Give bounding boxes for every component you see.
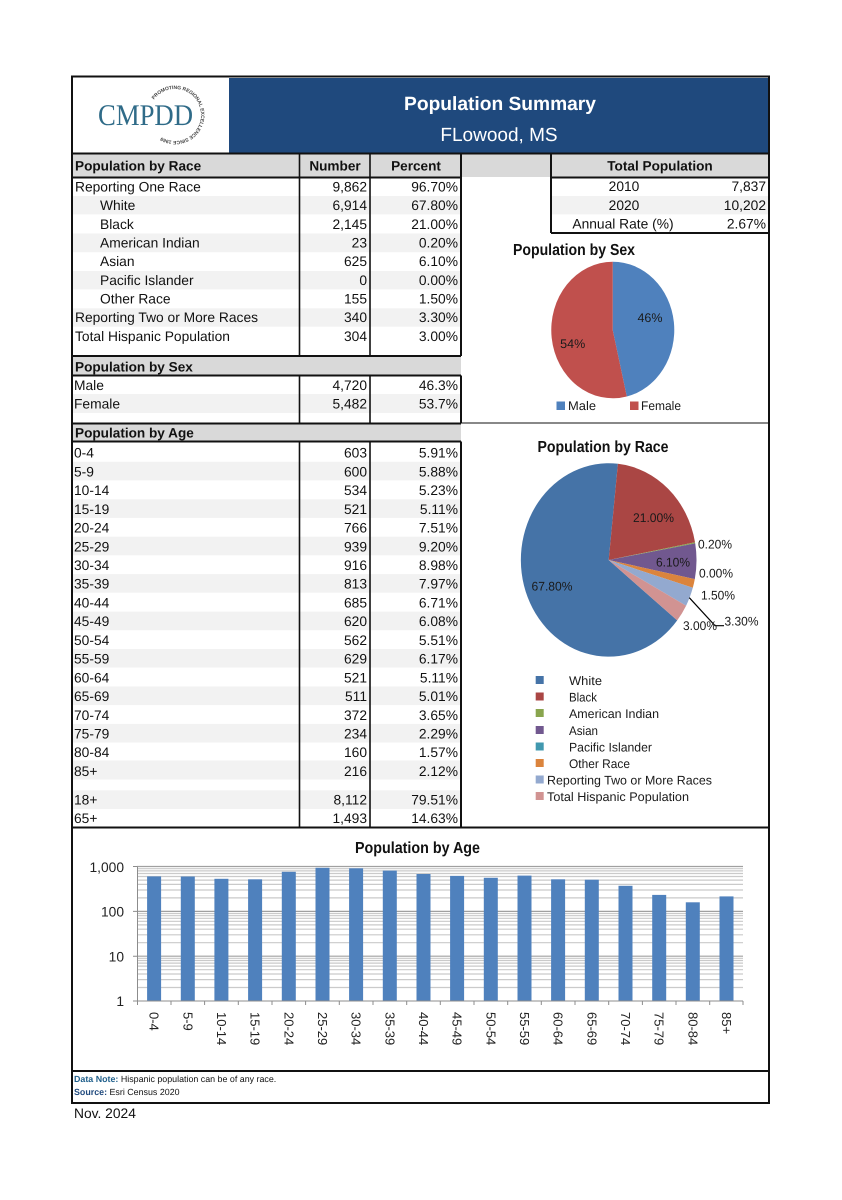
row: Total Hispanic Population xyxy=(75,329,458,344)
row: Asian xyxy=(100,254,458,269)
date: Nov. 2024 xyxy=(74,1106,136,1121)
row: Reporting One Race xyxy=(75,180,458,194)
row: 15-19 xyxy=(73,499,461,518)
legend: race: Asian xyxy=(569,724,598,738)
row: 10-14: 5.23% xyxy=(419,483,458,498)
heading: population by race: Number xyxy=(309,158,361,174)
table: total population xyxy=(551,154,768,232)
slice: american indian xyxy=(609,542,695,560)
row: 20-24: 766 xyxy=(344,521,367,536)
row: Other Race xyxy=(100,292,458,306)
slice: asian xyxy=(609,543,697,579)
row: 15-19: 5.11% xyxy=(420,502,458,517)
row: 2010: 7,837 xyxy=(731,179,766,194)
row: 30-34: 30-34 xyxy=(74,558,110,573)
x axis labels: 55-59 xyxy=(517,1012,532,1045)
row: Other Race: 1.50% xyxy=(419,292,458,306)
row: 15-19: 15-19 xyxy=(74,502,110,517)
row: Reporting One Race: 96.70% xyxy=(411,180,458,194)
label: 1.50%: 1.50% xyxy=(701,588,735,602)
row: 65+: 65+ xyxy=(74,811,97,826)
row: 50-54: 562 xyxy=(344,633,367,648)
row: 70-74: 372 xyxy=(344,708,367,723)
legend: sex xyxy=(556,399,681,413)
row: 0-4: 603 xyxy=(344,446,367,461)
row: 60-64: 521 xyxy=(344,670,367,685)
row: Reporting Two or More Races xyxy=(73,308,461,327)
row: 30-34: 916 xyxy=(344,558,367,573)
row: 75-79: 234 xyxy=(344,726,367,742)
row: 30-34: 8.98% xyxy=(419,558,458,573)
row: 65-69: 65-69 xyxy=(74,689,110,704)
row: 25-29: 25-29 xyxy=(74,539,110,554)
row: 45-49: 6.08% xyxy=(419,614,458,629)
row: Female: 5,482 xyxy=(332,396,367,412)
x axis labels: 75-79 xyxy=(652,1012,667,1045)
heading: population by race: Population by Race xyxy=(75,158,202,174)
row: 15-19: 521 xyxy=(344,502,367,517)
row: Black: Black xyxy=(100,217,134,232)
x axis labels: 65-69 xyxy=(584,1012,599,1045)
y axis labels xyxy=(89,860,124,1009)
row: 25-29: 939 xyxy=(344,539,367,554)
x axis labels: 20-24 xyxy=(281,1012,296,1045)
legend: race: Other Race xyxy=(569,757,630,771)
row: 35-39 xyxy=(73,574,461,593)
row: 25-29 xyxy=(73,537,461,555)
row: White: White xyxy=(100,198,136,213)
heading: population by age: Population by Age xyxy=(75,426,194,440)
table: population by sex xyxy=(73,357,461,413)
row: American Indian: 23 xyxy=(352,236,367,250)
x axis labels: 40-44 xyxy=(416,1012,431,1045)
logo: CMPDD xyxy=(98,86,204,144)
row: 0-4: 5.91% xyxy=(419,446,458,461)
label: 0.00%: 0.00% xyxy=(699,566,733,580)
row: 40-44 xyxy=(74,596,458,610)
row: Pacific Islander: Pacific Islander xyxy=(100,273,194,288)
row: American Indian: 0.20% xyxy=(419,236,458,250)
row: Pacific Islander xyxy=(73,271,461,289)
row: 70-74 xyxy=(74,708,458,723)
x axis labels: 70-74 xyxy=(618,1012,633,1045)
slice: black xyxy=(609,464,695,560)
legend: race: Total Hispanic Population xyxy=(547,790,689,804)
heading: population by age xyxy=(73,424,461,442)
row: Total Hispanic Population: 304 xyxy=(344,329,367,344)
row: 20-24 xyxy=(74,521,458,536)
slice: female xyxy=(551,262,627,398)
row: 80-84: 160 xyxy=(344,745,367,760)
row: 75-79: 2.29% xyxy=(419,726,458,742)
row: 18+ xyxy=(73,790,461,809)
row: 80-84: 1.57% xyxy=(419,745,458,760)
x axis labels: 0-4 xyxy=(147,1012,162,1031)
row: 65+: 14.63% xyxy=(411,811,458,826)
slice: hispanic xyxy=(609,560,686,620)
row: Black: 2,145 xyxy=(332,217,367,232)
row: 65+: 1,493 xyxy=(332,811,367,826)
legend: sex: Male xyxy=(568,399,596,413)
chart: population by race pie xyxy=(521,439,758,804)
row: 5-9: 600 xyxy=(344,464,367,479)
row: 2020: 10,202 xyxy=(724,198,766,213)
heading: population by sex xyxy=(73,357,461,375)
x axis labels: 5-9 xyxy=(180,1012,195,1031)
slice: other race xyxy=(609,560,695,588)
legend: race xyxy=(536,674,712,804)
slice: male xyxy=(613,262,674,396)
row: 85+: 2.12% xyxy=(419,764,458,779)
row: American Indian xyxy=(73,233,461,252)
row: 50-54: 5.51% xyxy=(419,633,458,648)
row: Annual Rate: Annual Rate (%) xyxy=(572,216,674,232)
row: 2010 xyxy=(609,179,766,194)
row: Other Race: 155 xyxy=(344,292,367,306)
row: 80-84 xyxy=(74,745,458,760)
title band: Population Summary xyxy=(404,94,596,115)
x axis labels xyxy=(147,1012,734,1045)
label: 54%: 54% xyxy=(560,337,585,351)
row: Reporting Two or More Races: 340 xyxy=(344,310,367,325)
row: 0-4 xyxy=(74,446,458,461)
slice: white xyxy=(521,463,677,657)
row: Male xyxy=(74,378,458,393)
row: 45-49 xyxy=(73,612,461,630)
leader line xyxy=(689,598,724,626)
row: White: 67.80% xyxy=(411,198,458,213)
x axis labels: 45-49 xyxy=(450,1012,465,1045)
chart title: Population by Race xyxy=(538,439,669,456)
row: Reporting Two or More Races: 3.30% xyxy=(419,310,458,325)
row: 2020: 2020 xyxy=(609,198,640,213)
label: 6.10%: 6.10% xyxy=(656,556,690,570)
row: 10-14: 534 xyxy=(344,483,367,498)
title band xyxy=(229,78,768,153)
row: 2020 xyxy=(552,196,768,214)
row: Male: 46.3% xyxy=(419,378,458,393)
row: Reporting One Race: Reporting One Race xyxy=(75,180,201,194)
slice: two or more races xyxy=(609,560,693,606)
x axis labels: 35-39 xyxy=(382,1012,397,1045)
row: 0-4: 0-4 xyxy=(74,446,94,461)
row: 60-64: 60-64 xyxy=(74,670,110,685)
y axis labels: 100 xyxy=(101,904,124,920)
chart title: Population by Sex xyxy=(513,242,635,259)
row: Other Race: Other Race xyxy=(100,292,171,306)
chart title: Population by Age xyxy=(355,840,480,857)
row: 5-9: 5-9 xyxy=(74,464,94,479)
row: White xyxy=(73,196,461,214)
legend: race: American Indian xyxy=(569,707,659,721)
row: 75-79 xyxy=(73,724,461,742)
row: 60-64: 5.11% xyxy=(420,670,458,685)
row: 45-49: 620 xyxy=(344,614,367,629)
row: Female xyxy=(73,394,461,413)
row: 65-69 xyxy=(73,686,461,705)
label: 21.00%: 21.00% xyxy=(633,511,674,525)
row: American Indian: American Indian xyxy=(100,236,200,250)
legend: race: Pacific Islander xyxy=(569,740,652,754)
row: 85+ xyxy=(73,760,461,780)
row: 10-14 xyxy=(74,483,458,498)
row: 2010: 2010 xyxy=(609,179,640,194)
row: Reporting One Race: 9,862 xyxy=(332,180,367,194)
heading: population by sex: Population by Sex xyxy=(75,360,193,374)
row: 25-29: 9.20% xyxy=(419,539,458,554)
row: Female: Female xyxy=(74,396,120,412)
label: 3.30%: 3.30% xyxy=(724,614,758,628)
row: Black xyxy=(100,217,458,232)
logo: CMPDD: PROMOTING REGIONAL EXCELLENCE SINCE 1969 xyxy=(152,86,204,144)
data note: Data Note: Hispanic population can be of any race. xyxy=(74,1074,276,1084)
row: White: 6,914 xyxy=(332,198,367,213)
table: population by race xyxy=(73,154,551,344)
bars xyxy=(147,868,734,1001)
legend: race: Black xyxy=(569,690,598,704)
row: 55-59: 6.17% xyxy=(419,652,458,667)
row: 55-59: 55-59 xyxy=(74,652,110,667)
label: 0.20%: 0.20% xyxy=(698,538,732,552)
x axis labels: 15-19 xyxy=(248,1012,263,1045)
row: 85+: 216 xyxy=(344,764,367,779)
row: Total Hispanic Population: Total Hispanic Population xyxy=(75,329,230,344)
heading: population by race: Percent xyxy=(391,158,441,174)
y axis labels: 1,000 xyxy=(89,860,124,875)
row: 65-69: 5.01% xyxy=(419,689,458,704)
legend: race: Reporting Two or More Races xyxy=(547,774,712,788)
row: Black: 21.00% xyxy=(411,217,458,232)
x axis labels: 60-64 xyxy=(551,1012,566,1045)
row: 10-14: 10-14 xyxy=(74,483,110,498)
x axis labels: 85+ xyxy=(719,1012,734,1034)
x axis labels: 30-34 xyxy=(349,1012,364,1045)
row: 70-74: 3.65% xyxy=(419,708,458,723)
label: 3.00%: 3.00% xyxy=(683,619,717,633)
row: Pacific Islander: 0 xyxy=(359,273,367,288)
x axis labels: 25-29 xyxy=(315,1012,330,1045)
row: 18+: 18+ xyxy=(74,792,97,807)
row: Asian: Asian xyxy=(100,254,135,269)
row: 35-39: 813 xyxy=(344,577,367,592)
row: 20-24: 20-24 xyxy=(74,521,110,536)
row: 85+: 85+ xyxy=(74,764,97,779)
row: Male: Male xyxy=(74,378,104,393)
row: 18+: 8,112 xyxy=(333,792,367,807)
row: 70-74: 70-74 xyxy=(74,708,110,723)
x axis labels: 50-54 xyxy=(483,1012,498,1045)
row: Total Hispanic Population: 3.00% xyxy=(419,329,458,344)
row: 65-69: 511 xyxy=(345,689,367,704)
row: Annual Rate xyxy=(572,216,766,232)
row: 55-59 xyxy=(73,649,461,668)
row: 40-44: 6.71% xyxy=(419,596,458,610)
row: 35-39: 7.97% xyxy=(419,577,458,592)
row: 5-9 xyxy=(73,462,461,480)
row: Asian: 6.10% xyxy=(419,254,458,269)
row: 40-44: 40-44 xyxy=(74,596,110,610)
legend: race: White xyxy=(569,674,602,688)
row: 20-24: 7.51% xyxy=(419,521,458,536)
row: 30-34 xyxy=(74,558,458,573)
row: Reporting Two or More Races: Reporting Two or More Races xyxy=(75,310,258,325)
row: 50-54 xyxy=(74,633,458,648)
row: Pacific Islander: 0.00% xyxy=(419,273,458,288)
row: 55-59: 629 xyxy=(344,652,367,667)
chart: population by age bars xyxy=(89,840,743,1045)
table: population by age xyxy=(73,424,461,826)
source: Source: Esri Census 2020 xyxy=(74,1087,180,1097)
logo: CMPDD: CMPDD xyxy=(98,99,193,132)
legend: sex: Female xyxy=(641,399,681,413)
row: 75-79: 75-79 xyxy=(74,726,110,742)
row: Annual Rate: 2.67% xyxy=(727,216,766,232)
title band: FLowood, MS xyxy=(440,125,558,146)
row: 80-84: 80-84 xyxy=(74,745,110,760)
y axis labels: 1 xyxy=(116,994,124,1009)
row: 60-64 xyxy=(74,670,458,685)
x axis labels: 80-84 xyxy=(685,1012,700,1045)
row: Male: 4,720 xyxy=(332,378,367,393)
x axis labels: 10-14 xyxy=(214,1012,229,1045)
row: Female: 53.7% xyxy=(419,396,458,412)
label: 67.80%: 67.80% xyxy=(532,580,572,594)
row: 5-9: 5.88% xyxy=(419,464,458,479)
row: 45-49: 45-49 xyxy=(74,614,110,629)
row: 35-39: 35-39 xyxy=(74,577,110,592)
row: 65+ xyxy=(74,811,458,826)
heading: total population xyxy=(551,154,768,177)
row: 18+: 79.51% xyxy=(411,792,458,807)
row: 50-54: 50-54 xyxy=(74,633,110,648)
y axis labels: 10 xyxy=(109,950,124,964)
label: 46%: 46% xyxy=(637,311,663,325)
heading: population by race xyxy=(73,154,551,177)
row: Asian: 625 xyxy=(344,254,367,269)
row: 40-44: 685 xyxy=(344,596,367,610)
chart: population by sex pie xyxy=(513,242,681,413)
header banner xyxy=(98,78,768,152)
heading: total population: Total Population xyxy=(607,158,713,174)
